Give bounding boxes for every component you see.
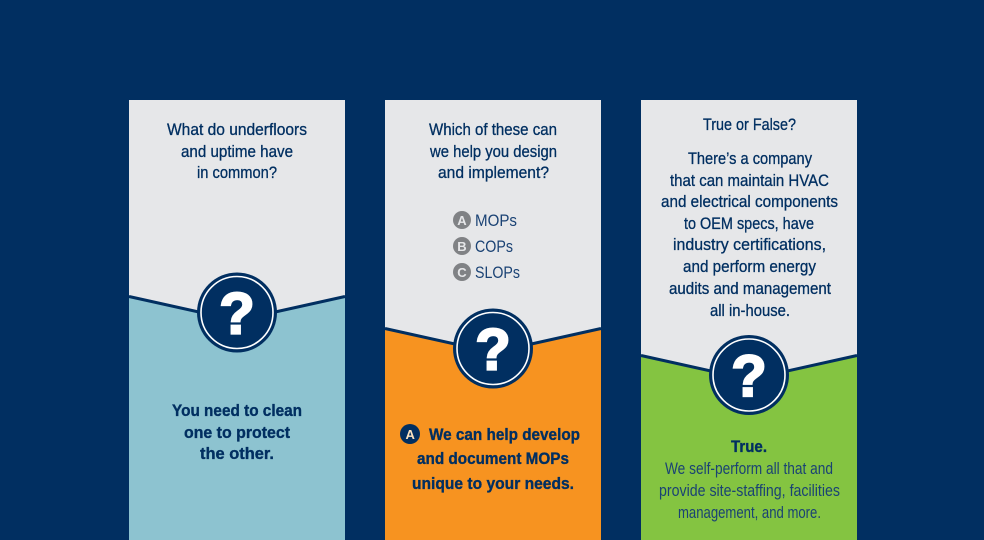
question text [661,115,838,320]
answer text [659,437,840,522]
question text: There’s a company [688,149,812,168]
question text: What do underfloors [167,120,307,139]
answer background: light blue [129,296,345,540]
answer text: A [406,427,416,442]
question text: audits and management [669,279,831,298]
question text: in common? [197,163,277,182]
answer text: and document MOPs [417,449,569,468]
question text: and perform energy [683,257,816,276]
answer text [400,424,580,493]
question text: industry certifications, [673,235,826,254]
answer options list: MOPs [475,211,517,230]
answer options list: A [457,213,467,228]
icon: question mark badge [197,272,277,352]
answer text: You need to clean [172,401,302,420]
question text: and uptime have [181,142,293,161]
answer text: one to protect [184,423,290,442]
answer text: provide site-staffing, facilities [659,481,840,500]
icon: question mark badge: ? [475,318,511,382]
answer options list: SLOPs [475,263,520,282]
answer text: We can help develop [429,425,580,444]
answer options list [453,211,520,282]
question text: to OEM specs, have [684,214,814,233]
icon: question mark badge: ? [219,282,255,346]
question text: and electrical components [661,192,838,211]
answer text [172,401,302,463]
question text: True or False? [703,115,796,134]
answer text: the other. [200,444,274,463]
panel: MOPs question [385,100,601,540]
answer text: unique to your needs. [412,474,574,493]
icon: question mark badge: ? [731,344,767,409]
answer text: management, and more. [678,503,821,522]
question text: we help you design [429,142,557,161]
question text: that can maintain HVAC [670,171,829,190]
question text: and implement? [438,163,549,182]
question text [167,120,307,182]
answer text: We self-perform all that and [665,459,833,478]
icon: question mark badge [453,308,533,388]
question text: Which of these can [429,120,557,139]
chevron divider [129,296,345,320]
icon: question mark badge [709,335,789,415]
answer text: True. [731,437,767,456]
question text: all in-house. [710,301,790,320]
answer options list: COPs [475,237,513,256]
answer options list: C [457,265,467,280]
panel: underfloors question [129,100,345,540]
question text [429,120,557,182]
answer background: orange [385,328,601,540]
answer options list: B [457,239,467,254]
panel: true or false question [641,100,857,540]
chevron divider [385,328,601,352]
answer background: green [641,356,857,540]
chevron divider [641,356,857,380]
